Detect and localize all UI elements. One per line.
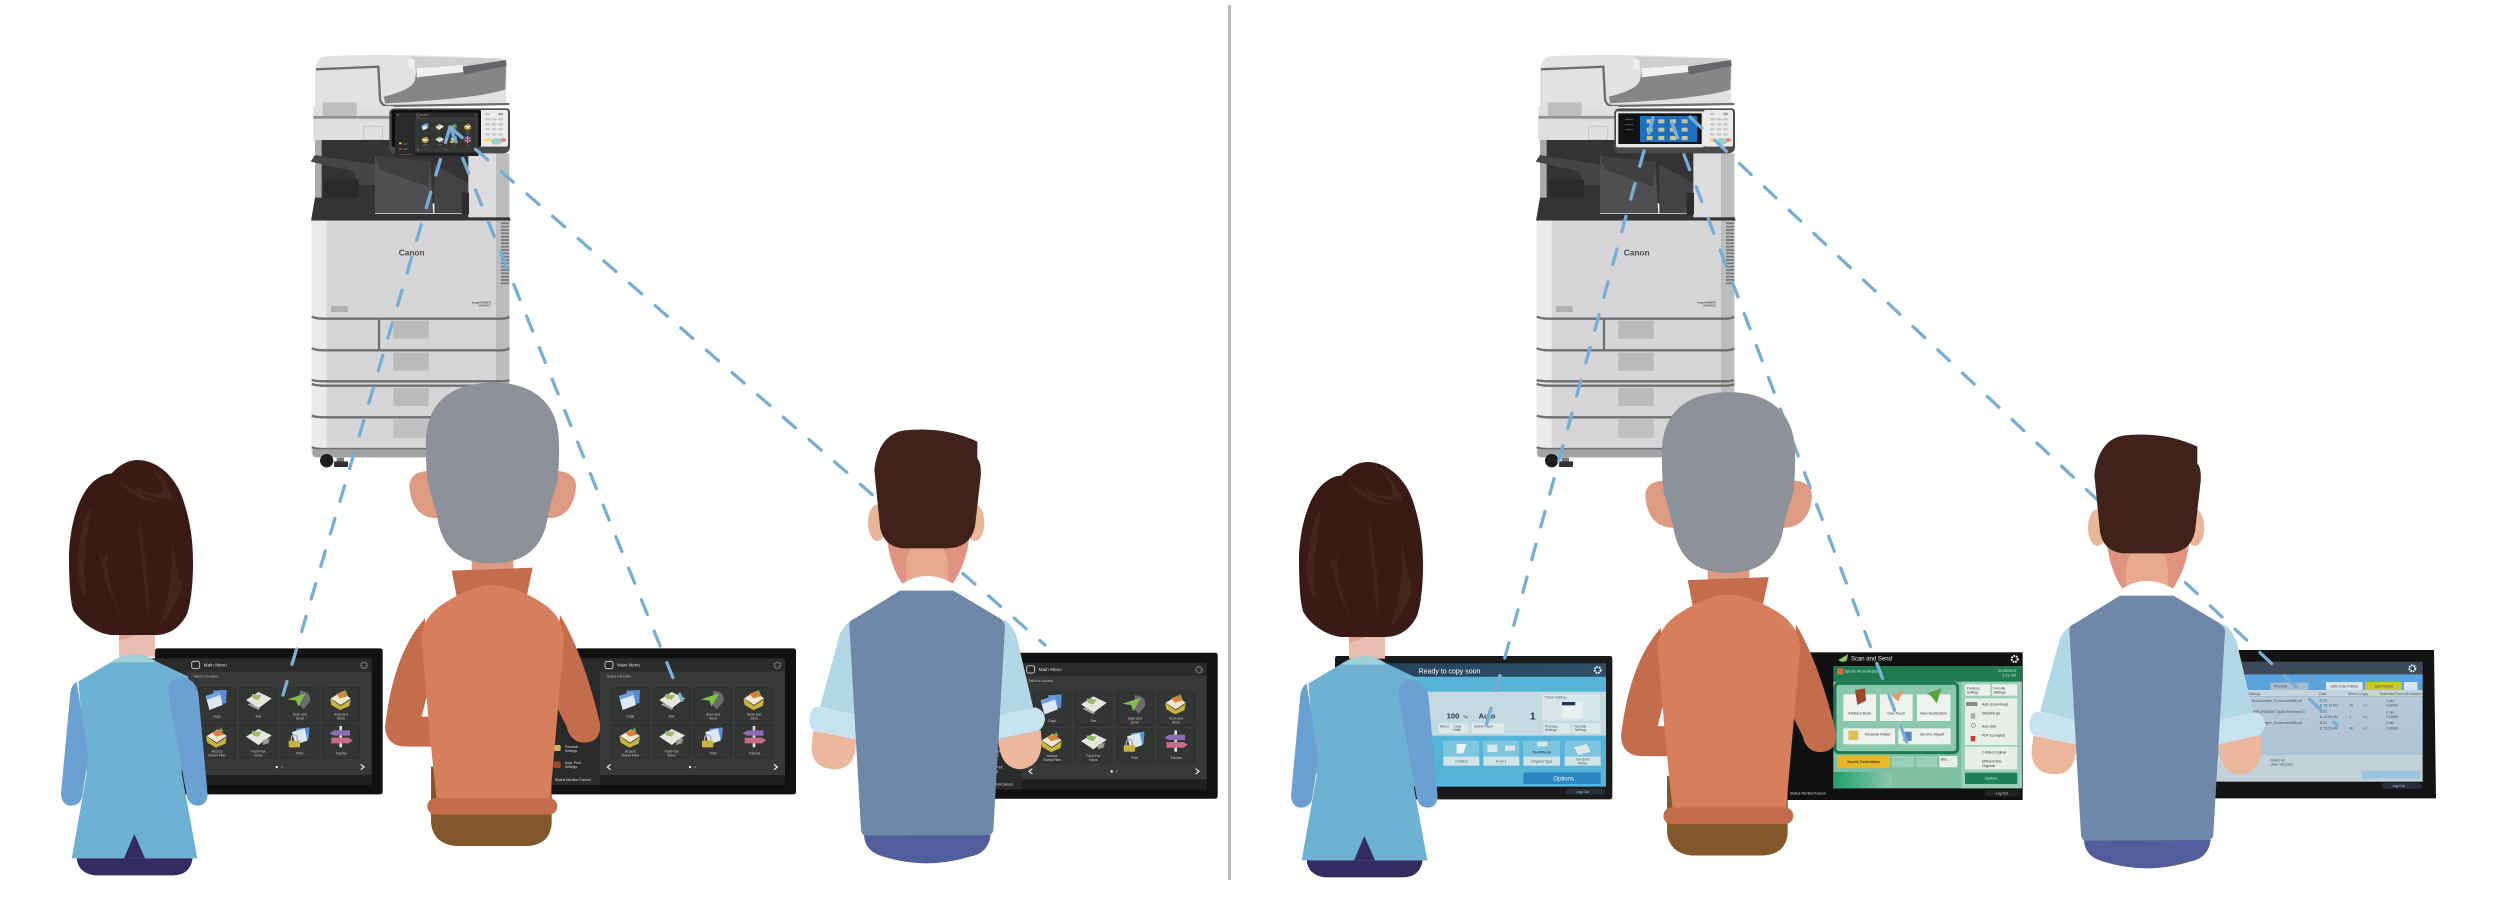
tablet: print job list screen: DemoSample_GovernmentBill.pdf [2252, 699, 2302, 703]
tablet: print job list screen: x 1 [2363, 704, 2368, 708]
tablet: copy screen: Direct [1440, 725, 1449, 729]
tablet: copy screen: Options [1553, 776, 1574, 782]
tablet: scan and send screen: 300x300 dpi [1982, 712, 2000, 716]
tablet: print job list screen: 3 min [2386, 699, 2394, 703]
tablet: scan and send screen: Scan and Send [1851, 657, 1892, 663]
tablet: scan and send screen: 2:31 PM [2002, 673, 2016, 677]
person: man in blue vest [2029, 435, 2265, 868]
tablet: scan and send screen: Status Monitor/Cancel [1790, 792, 1826, 796]
tablet: main menu, centre user [530, 648, 796, 794]
tablet: print job list screen: 11:23:53 AM [2319, 726, 2338, 730]
tablet: scan and send screen: Send to Myself [1920, 733, 1945, 737]
tablet: scan and send screen: Settings [1967, 690, 1979, 694]
tablet: print job list screen: 3 min [2386, 721, 2394, 725]
tablet: scan and send screen: Specify Destinations [1847, 760, 1880, 764]
tablet: copy screen: Settings [1574, 728, 1587, 732]
tablet: scan and send screen: One-Touch [1887, 712, 1905, 716]
tablet: copy screen: Original Type [1531, 760, 1552, 764]
tablet: scan and send screen: Bloc [1941, 758, 1948, 762]
printer with blue panel [1536, 55, 1736, 467]
tablet: scan and send screen: Address Book [1848, 712, 1871, 716]
tablet: scan and send screen: Options [1985, 777, 1997, 781]
tablet: copy screen: Text/Photo [1532, 750, 1552, 754]
tablet: copy screen: Ready to copy soon [1419, 668, 1481, 675]
tablet: print job list screen: DemoSample_GovernmentBill.pdf [2252, 721, 2302, 725]
tablet: print job list screen: AMPLIFIEDNET Quick Reference G [2252, 710, 2305, 714]
tablet: print job list screen: Settings [2248, 692, 2261, 696]
tablet: print job list screen: C16896 [2386, 726, 2398, 730]
tablet: copy screen: 1 [1530, 711, 1536, 722]
tablet: main menu, right user [952, 653, 1218, 799]
person: man in blue vest [809, 430, 1045, 863]
tablet: copy screen: 100 [1447, 712, 1459, 721]
tablet: scan and send screen: PDF (Compact) [1982, 734, 2005, 738]
tablet: print job list screen: Jobs to Be Printed [2331, 684, 2358, 688]
tablet: copy screen: Copy [1453, 725, 1461, 729]
tablet: print job list screen: Personal [2274, 684, 2287, 688]
tablet: print job list screen: 11:20:13 AM [2319, 704, 2338, 708]
tablet: scan and send screen: Originals [1982, 764, 1995, 768]
tablet: copy screen: % [1463, 715, 1468, 721]
tablet: scan and send screen: Personal Folder [1865, 733, 1891, 737]
person: grey-haired man in orange [385, 383, 600, 846]
tablet: scan and send screen: Favorite [1993, 686, 2006, 690]
tablet: copy screen: Select Paper [1474, 725, 1494, 729]
person: grey-haired man in orange [1621, 392, 1836, 855]
tablet: copy screen: Settings [1545, 728, 1557, 732]
tablet: scan and send screen: Auto Size [1982, 724, 1996, 728]
panel: left scene [61, 55, 1218, 875]
tablet: copy screen: N on 1 [1496, 760, 1507, 764]
tablet: scan and send screen: Previous [1967, 686, 1980, 690]
tablet: scan and send screen: Delete [1918, 758, 1927, 762]
tablet: print job list screen: 11/12 [2319, 721, 2328, 725]
tablet: print job list screen [2180, 650, 2436, 798]
tablet: print job list screen: Jobs Printed [2374, 684, 2393, 688]
tablet: print job list screen: x 1 [2363, 726, 2368, 730]
tablet: copy screen [1335, 656, 1612, 799]
tablet: copy screen: Ratio [1453, 728, 1461, 732]
tablet: print job list screen: 40 [2349, 704, 2353, 708]
person: woman in blue [61, 460, 208, 875]
tablet: print job list screen: C16896 [2386, 715, 2398, 719]
tablet: copy screen: Notice [1578, 761, 1588, 765]
tablet: scan and send screen: Specify the destination. [1845, 669, 1879, 673]
tablet: print job list screen: Sheet x Copy [2348, 692, 2368, 696]
tablet: print job list screen: 0 min [2386, 710, 2394, 714]
tablet: scan and send screen: 11/08/2015 [1998, 669, 2016, 673]
tablet: copy screen: 2-Sided [1455, 760, 1468, 764]
tablet: print job list screen: C16896 [2386, 704, 2398, 708]
tablet: print job list screen: (Max 100 jobs) [2271, 763, 2293, 767]
tablet: copy screen: Favorite [1574, 725, 1587, 729]
tablet: copy screen: Previous [1545, 725, 1558, 729]
divider between the two scenes [1228, 5, 1231, 880]
dashed sight lines [1485, 117, 2337, 743]
tablet: scan and send screen: Auto (Color/Gray) [1982, 702, 2008, 706]
tablet: print job list screen: 1 [2349, 715, 2351, 719]
tablet: scan and send screen: New Destination [1920, 712, 1947, 716]
tablet: copy screen: Log Out [1577, 790, 1589, 794]
tablet: scan and send screen: Settings [1993, 690, 2006, 694]
tablet: print job list screen: Estimated Time/Job Number [2380, 692, 2423, 696]
tablet: copy screen: Auto [1479, 711, 1496, 720]
tablet: print job list screen: Date [2319, 692, 2327, 696]
tablet: scan and send screen [1760, 652, 2023, 800]
tablet: copy screen: Check Settings [1544, 695, 1567, 699]
tablet: print job list screen: 40 [2349, 726, 2353, 730]
printer with dark main menu panel [311, 55, 511, 467]
tablet: print job list screen: x 1 [2363, 715, 2368, 719]
panel: right scene [1291, 55, 2436, 877]
tablet: copy screen: Job Done [1576, 758, 1590, 762]
tablet: scan and send screen: 2-Sided Original [1982, 750, 2006, 754]
tablet: print job list screen: 11:21:08 AM [2319, 715, 2338, 719]
tablet: main menu, left user [128, 648, 383, 794]
person: woman in blue [1291, 462, 1438, 877]
tablet: scan and send screen: Different Size [1982, 760, 2002, 764]
dashed sight lines [283, 127, 1045, 700]
tablet: scan and send screen: Details [1895, 758, 1905, 762]
tablet: print job list screen: Select All [2271, 758, 2285, 762]
tablet: print job list screen: Log Out [2393, 784, 2405, 788]
tablet: print job list screen: 11/12 [2319, 698, 2328, 702]
tablet: scan and send screen: Log Out [1996, 792, 2008, 796]
tablet: print job list screen: 11/12 [2319, 710, 2328, 714]
